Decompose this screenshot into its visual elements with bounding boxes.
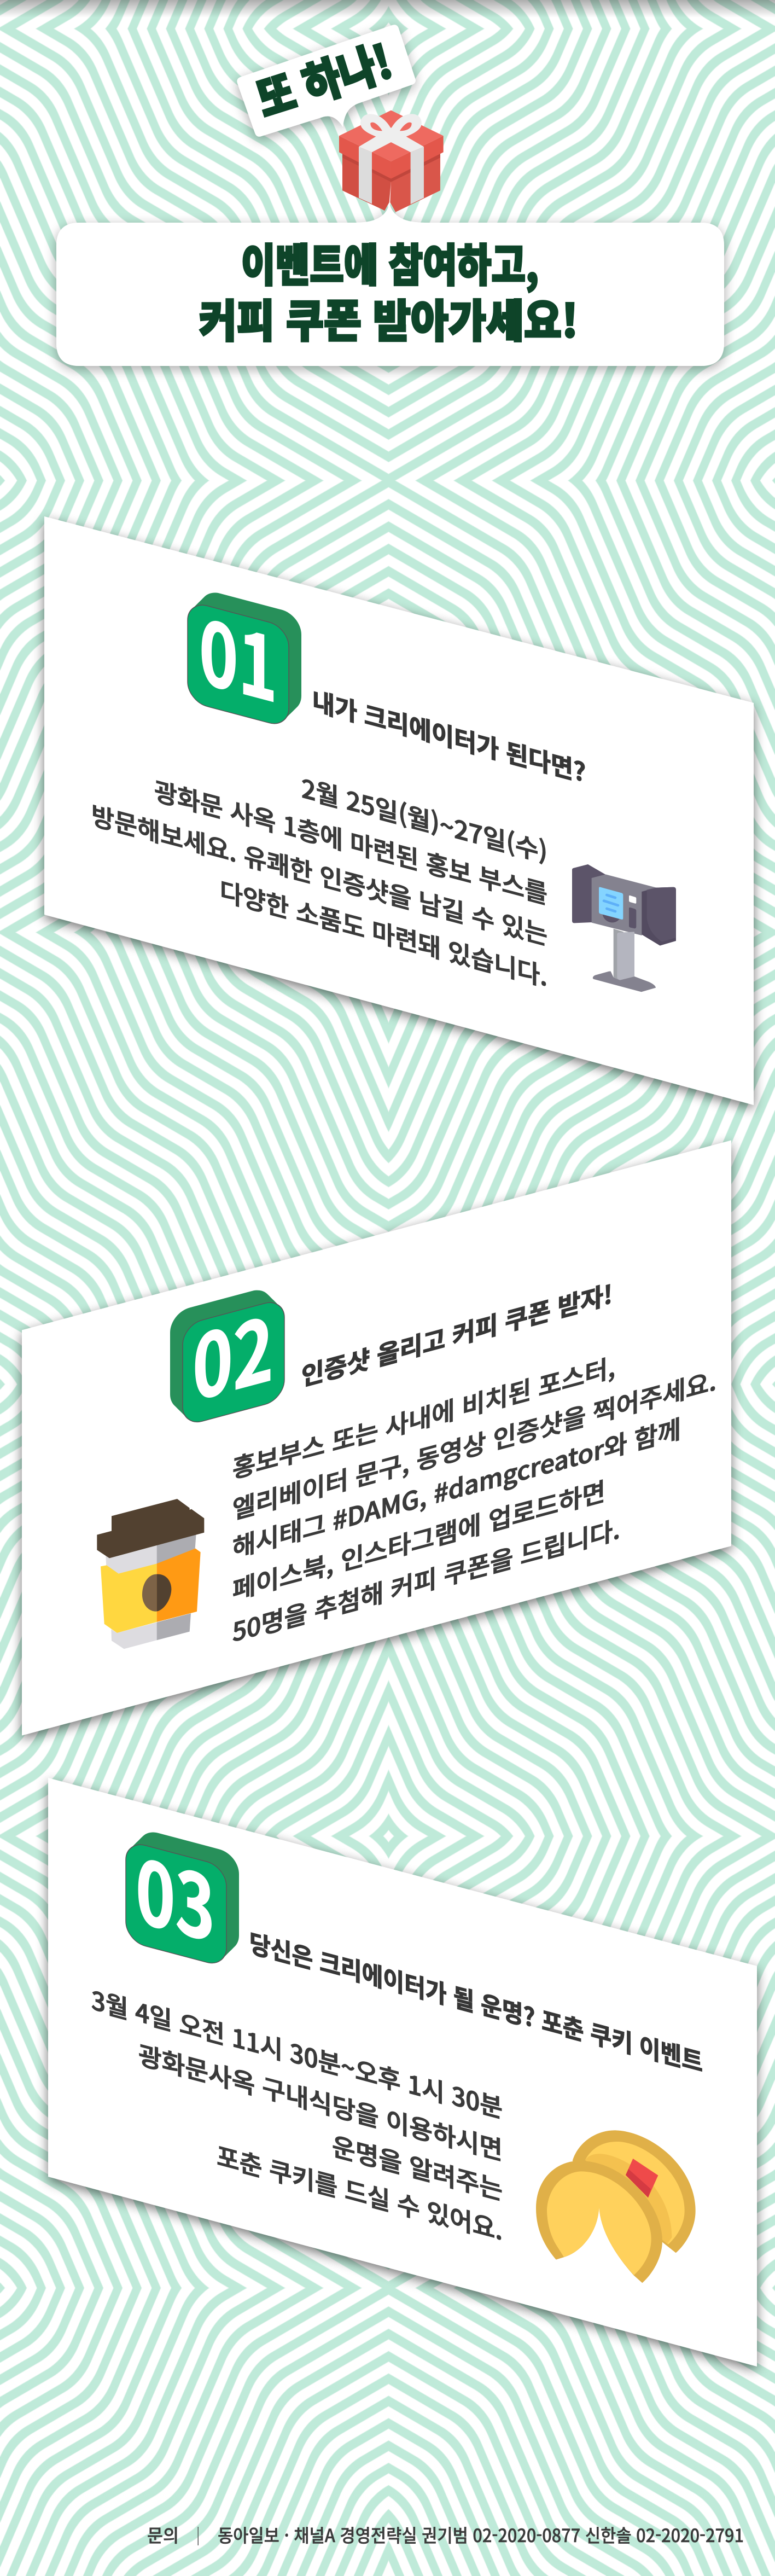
title heading: 이벤트에 참여하고, xyxy=(241,229,539,294)
panel 2: post a photo xyxy=(22,1140,731,1735)
panel 1 body text: 광화문 사옥 1층에 마련된 홍보 부스를 xyxy=(154,771,547,911)
title heading: 커피 쿠폰 받아가세요! xyxy=(199,285,578,350)
panel 2 body text: 홍보부스 또는 사내에 비치된 포스터, xyxy=(232,1347,615,1486)
icon: fortune cookie xyxy=(536,2130,696,2283)
panel 1 body text xyxy=(91,713,547,994)
number badge 03: 03 xyxy=(136,1822,215,1967)
panel 3 body text: 운명을 알려주는 xyxy=(332,2126,503,2207)
title heading xyxy=(199,229,578,350)
icon: photo booth xyxy=(572,864,676,992)
panel 2 body text: 해시태그 #DAMG, #damgcreator와 함께 xyxy=(232,1409,681,1565)
panel 3 body text: 3월 4일 오전 11시 30분~오후 1시 30분 xyxy=(91,1980,503,2125)
panel 2 heading: 인증샷 올리고 커피 쿠폰 받자! xyxy=(301,1274,613,1393)
icon: gift box xyxy=(339,111,444,212)
panel 1 body text: 2월 25일(월)~27일(수) xyxy=(301,769,547,870)
panel 1: become a creator xyxy=(44,516,754,1105)
panel 2 body text: 페이스북, 인스타그램에 업로드하면 xyxy=(232,1472,605,1607)
panel 2 body text: 엘리베이터 문구, 동영상 인증샷을 찍어주세요. xyxy=(232,1361,716,1527)
title panel with pointer xyxy=(56,203,724,366)
panel 1 body text: 다양한 소품도 마련돼 있습니다. xyxy=(220,871,547,994)
speech bubble text: 또 하나! xyxy=(248,26,399,130)
footer contact line: 문의 xyxy=(147,2521,179,2548)
panel 3 skewed content xyxy=(91,1810,703,2301)
panel 2 body text xyxy=(232,1320,716,1649)
panel 2 body text: 50명을 추첨해 커피 쿠폰을 드립니다. xyxy=(232,1509,620,1649)
speech bubble xyxy=(237,25,416,137)
panel 3 body text: 포춘 쿠키를 드실 수 있어요. xyxy=(217,2136,503,2248)
panel 1 skewed content xyxy=(91,554,586,1004)
panel 3: fortune cookie xyxy=(48,1778,757,2366)
panel 3 body text: 광화문사옥 구내식당을 이용하시면 xyxy=(138,2035,503,2167)
number badge 01: 01 xyxy=(199,583,277,728)
panel 3 heading: 당신은 크리에이터가 될 운명? 포춘 쿠키 이벤트 xyxy=(249,1923,703,2079)
panel 1 heading: 내가 크리에이터가 된다면? xyxy=(312,681,586,790)
icon: coffee cup xyxy=(97,1499,204,1649)
panel 2 skewed content xyxy=(170,1161,716,1666)
number badge 02: 02 xyxy=(193,1279,273,1426)
footer contact line: 동아일보 · 채널A 경영전략실 권기범 02-2020-0877 신한솔 02-2020-2791 xyxy=(218,2521,744,2548)
panel 3 body text xyxy=(91,1980,503,2248)
panel 1 body text: 방문해보세요. 유쾌한 인증샷을 남길 수 있는 xyxy=(91,795,547,952)
